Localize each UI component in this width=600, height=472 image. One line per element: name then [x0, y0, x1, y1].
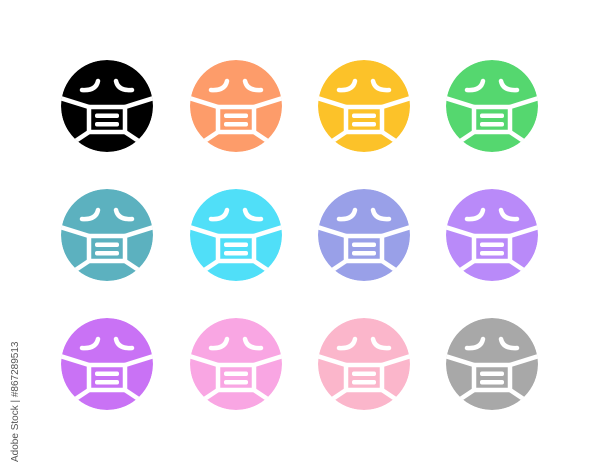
- icon: violet masked face: [57, 318, 157, 410]
- icon: periwinkle masked face: [314, 189, 414, 281]
- icon: green masked face: [442, 60, 542, 152]
- icon: cyan masked face: [186, 189, 286, 281]
- icon: lavender masked face: [442, 189, 542, 281]
- icon: gray masked face: [442, 318, 542, 410]
- icon: orange masked face: [186, 60, 286, 152]
- icon grid: [10, 60, 538, 462]
- icon: yellow masked face: [314, 60, 414, 152]
- watermark credit text: Adobe Stock | #867289513: [10, 341, 21, 462]
- icon: teal masked face: [57, 189, 157, 281]
- icon: pink masked face: [186, 318, 286, 410]
- icon: black masked face: [57, 60, 157, 152]
- icon: light pink masked face: [314, 318, 414, 410]
